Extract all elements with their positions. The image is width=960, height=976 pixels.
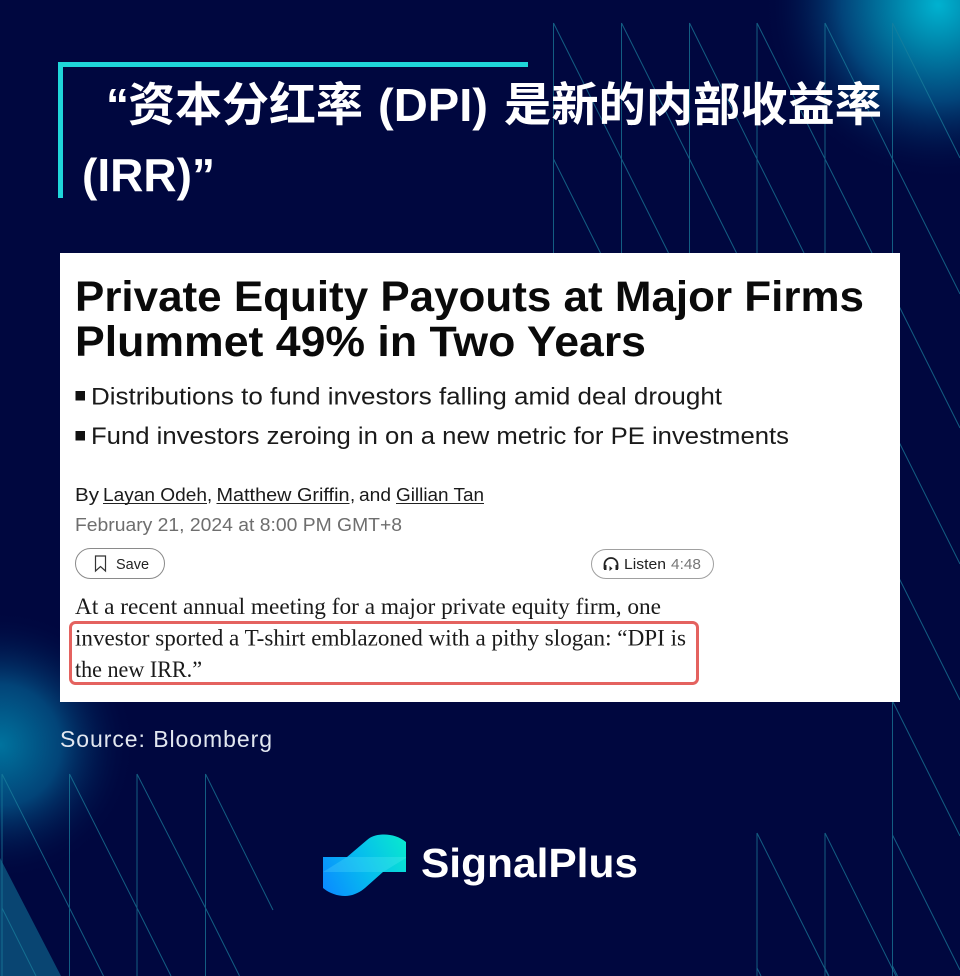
title: “ xyxy=(106,79,129,131)
bullet list: Fund investors zeroing in on a new metric for PE investments xyxy=(91,423,789,450)
source note: Source: Bloomberg xyxy=(60,726,272,752)
save button xyxy=(76,548,164,578)
line pattern: bottom right xyxy=(757,833,896,976)
byline: Layan Odeh xyxy=(103,484,207,505)
logo: SignalPlus xyxy=(323,834,638,896)
decorative triangle: bottom left xyxy=(0,858,61,976)
body text: investor sported a T-shirt emblazoned with a pithy slogan: “DPI is xyxy=(75,626,686,650)
byline: By xyxy=(75,484,100,505)
headline: Private Equity Payouts at Major Firms xyxy=(75,274,864,321)
icon: SignalPlus mark xyxy=(323,834,406,896)
title xyxy=(82,68,882,201)
listen button: Listen xyxy=(624,557,666,573)
body text xyxy=(75,594,686,682)
glow: top right xyxy=(760,0,960,182)
body text: the new IRR.” xyxy=(75,657,202,682)
byline: Matthew Griffin xyxy=(216,484,350,505)
title: (DPI) xyxy=(378,79,488,131)
panel: article screenshot xyxy=(60,253,900,702)
wordmark: SignalPlus xyxy=(421,840,638,886)
glow: left xyxy=(0,610,136,882)
listen button xyxy=(592,550,714,578)
byline: and xyxy=(359,484,391,505)
byline: , xyxy=(350,484,355,505)
body text: At a recent annual meeting for a major private equity firm, one xyxy=(75,594,661,619)
listen button: 4:48 xyxy=(671,557,701,573)
line pattern: bottom left xyxy=(2,774,273,976)
byline: Gillian Tan xyxy=(396,484,484,505)
callout: red highlight box xyxy=(70,622,698,684)
title bracket xyxy=(58,62,528,198)
byline xyxy=(75,484,484,505)
title: (IRR) xyxy=(82,149,192,201)
line pattern: top right xyxy=(554,23,960,976)
date: February 21, 2024 at 8:00 PM GMT+8 xyxy=(75,514,402,535)
bullet list xyxy=(76,384,789,450)
title: 资本分红率 xyxy=(128,68,363,135)
headline: Plummet 49% in Two Years xyxy=(75,319,646,366)
headline xyxy=(75,274,864,366)
title: ” xyxy=(192,149,215,201)
byline: , xyxy=(207,484,212,505)
save button: Save xyxy=(116,557,149,573)
bullet list: Distributions to fund investors falling amid deal drought xyxy=(91,384,722,410)
title: 是新的内部收益率 xyxy=(504,68,882,135)
